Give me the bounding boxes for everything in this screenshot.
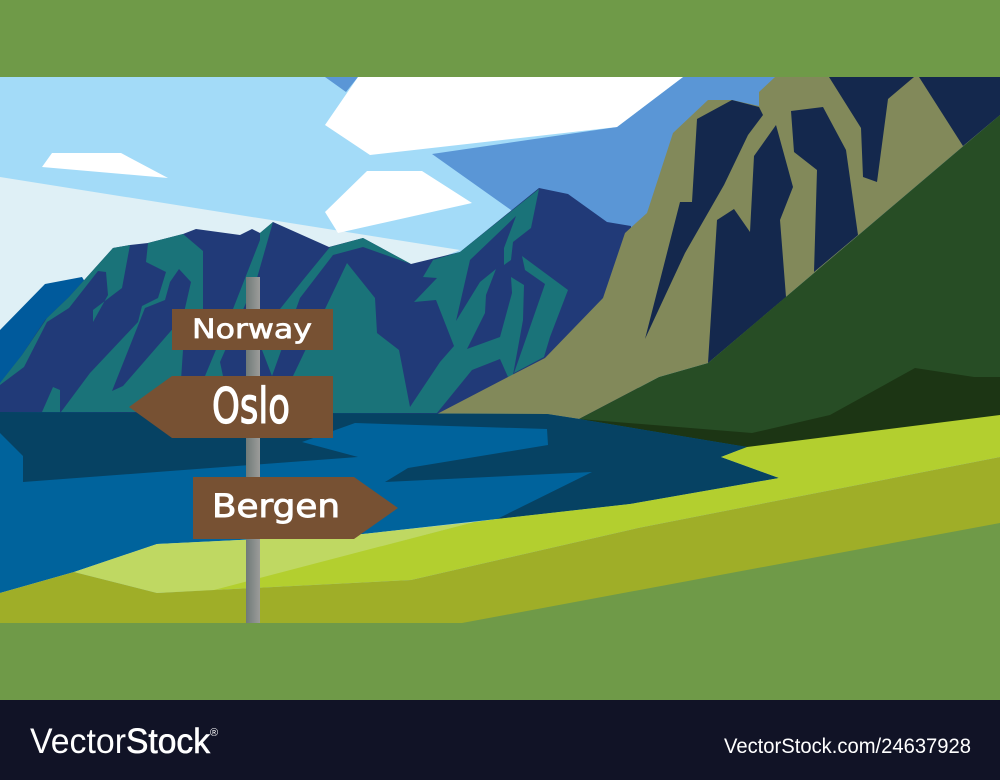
left mountain range [0,188,640,420]
green hillside [579,115,1000,450]
lake [0,412,779,593]
pole [246,277,260,623]
back blue mountain [0,277,90,390]
sign: Bergen [193,477,398,539]
sign: Bergen: Bergen [212,487,340,525]
dark cliff rock faces [645,77,1000,363]
footer bar [0,700,1000,780]
registered mark: ® [210,727,218,739]
foreground meadow [0,415,1000,700]
sign: Norway: Norway [192,314,312,345]
olive cliff [437,77,1000,419]
clouds [42,77,683,233]
sign: Oslo: Oslo [212,378,290,435]
signpost [129,277,398,623]
sign: Oslo [129,376,333,438]
image id: VectorStock.com/24637928 [724,735,971,758]
top green band [0,0,1000,77]
logo: VectorStock [30,722,210,761]
sky [0,77,1000,623]
sign: Norway [172,309,333,350]
